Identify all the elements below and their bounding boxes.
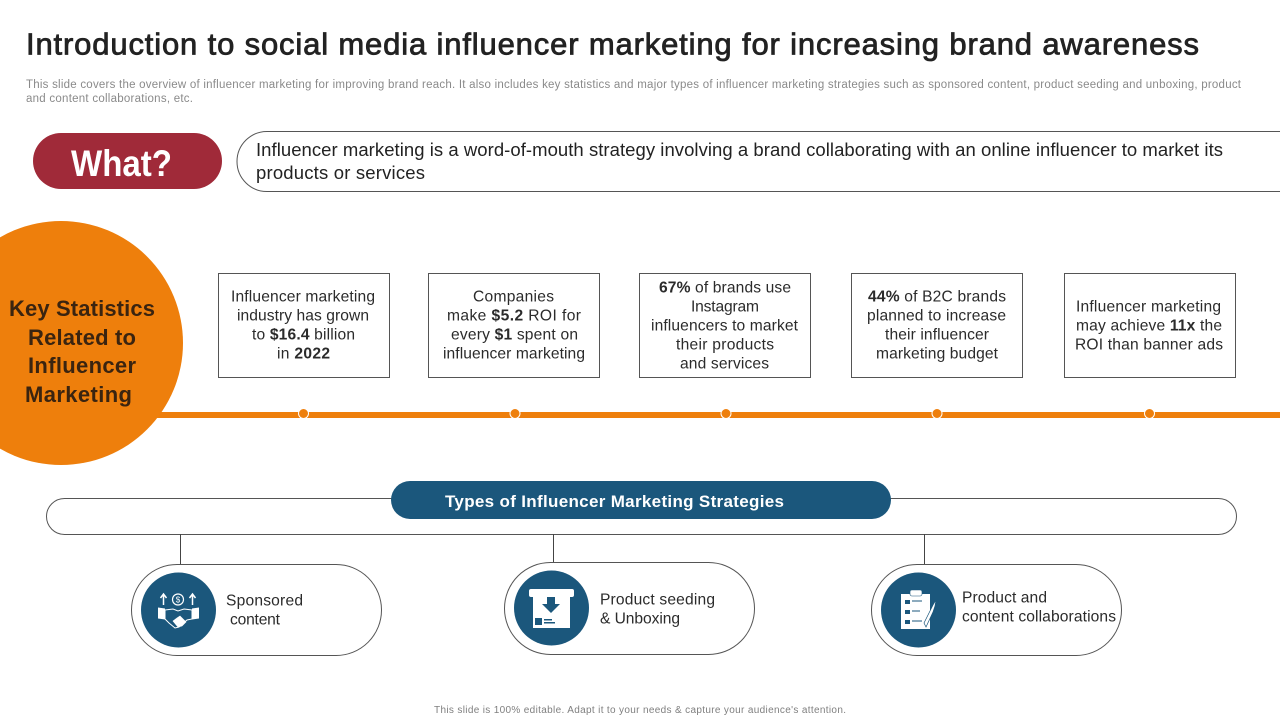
what badge xyxy=(33,133,222,189)
stat box 3: influencers to market xyxy=(651,318,799,334)
strategy 3: collaborations: content collaborations xyxy=(962,608,1116,626)
title: Introduction to social media influencer marketing for increasing brand awareness xyxy=(26,26,1199,62)
key statistics circle: Related to xyxy=(28,325,136,350)
strategies heading xyxy=(391,481,891,519)
stat box 3 xyxy=(640,274,810,378)
footer note: This slide is 100% editable. Adapt it to your needs & capture your audience's attention. xyxy=(434,705,846,716)
stat box 5: ROI than banner ads xyxy=(1075,336,1223,354)
stat box 4: planned to increase xyxy=(867,308,1006,324)
connector 3 xyxy=(924,534,926,565)
key statistics circle: Key Statistics xyxy=(9,296,155,321)
stat box 5 xyxy=(1064,274,1236,378)
stat box 3: their products xyxy=(676,336,774,354)
definition callout xyxy=(237,132,1280,192)
strategy 2: product seeding: Product seeding xyxy=(600,592,715,608)
subtitle description: and content collaborations, etc. xyxy=(26,93,193,105)
stat box 2: Companies xyxy=(473,288,554,306)
stat box 1 xyxy=(218,274,390,378)
stat box 5: may achieve 11x the xyxy=(1076,318,1222,334)
connector 2 xyxy=(552,534,554,563)
timeline line xyxy=(150,408,1280,418)
stat box 2: make $5.2 ROI for xyxy=(447,308,581,324)
key statistics circle xyxy=(0,221,183,465)
definition callout: products or services xyxy=(256,162,425,183)
icon: handshake with dollar coin xyxy=(158,594,199,628)
stat box 4: their influencer xyxy=(885,326,989,344)
stat box 1: to $16.4 billion xyxy=(252,326,355,344)
subtitle description xyxy=(26,79,1242,105)
stat box 3: and services xyxy=(680,356,769,372)
connector 1 xyxy=(180,534,182,565)
stat box 4: 44% of B2C brands xyxy=(868,288,1006,306)
stat box 1: industry has grown xyxy=(237,308,369,324)
icon: handshake with dollar coin: $ xyxy=(176,596,181,604)
strategy 2: product seeding: & Unboxing xyxy=(600,610,680,628)
key statistics circle: Marketing xyxy=(25,382,132,407)
stat box 3: Instagram xyxy=(691,298,759,316)
strategy 1: sponsored content: content xyxy=(230,612,281,628)
stat box 3: 67% of brands use xyxy=(659,280,791,296)
strategies heading: Types of Influencer Marketing Strategies xyxy=(445,492,784,511)
stat box 1: in 2022 xyxy=(277,346,330,362)
strategies bar outline xyxy=(46,498,1236,534)
icon: clipboard checklist xyxy=(901,590,936,629)
what badge: What? xyxy=(71,143,172,184)
icon: box xyxy=(529,589,574,628)
stat box 5: Influencer marketing xyxy=(1076,298,1221,316)
strategy 3: collaborations: Product and xyxy=(962,590,1047,606)
key statistics circle: Influencer xyxy=(28,353,136,378)
stat box 4 xyxy=(852,274,1022,378)
stat box 2 xyxy=(428,274,600,378)
strategy 1: sponsored content: Sponsored xyxy=(226,592,303,610)
strategy 3: collaborations xyxy=(872,564,1122,656)
strategy 2: product seeding xyxy=(504,562,754,654)
definition callout: Influencer marketing is a word-of-mouth strategy involving a brand collaborating with an online influencer to market its xyxy=(256,139,1223,160)
stat box 4: marketing budget xyxy=(876,346,999,362)
subtitle description: This slide covers the overview of influencer marketing for improving brand reach. It also includes key statistics and major types of influencer marketing strategies such as sponsored content, product seeding and unboxing, product xyxy=(26,79,1242,91)
stat box 2: influencer marketing xyxy=(443,346,585,362)
stat box 2: every $1 spent on xyxy=(451,326,578,344)
stat box 1: Influencer marketing xyxy=(231,288,375,306)
strategy 1: sponsored content xyxy=(132,564,382,656)
